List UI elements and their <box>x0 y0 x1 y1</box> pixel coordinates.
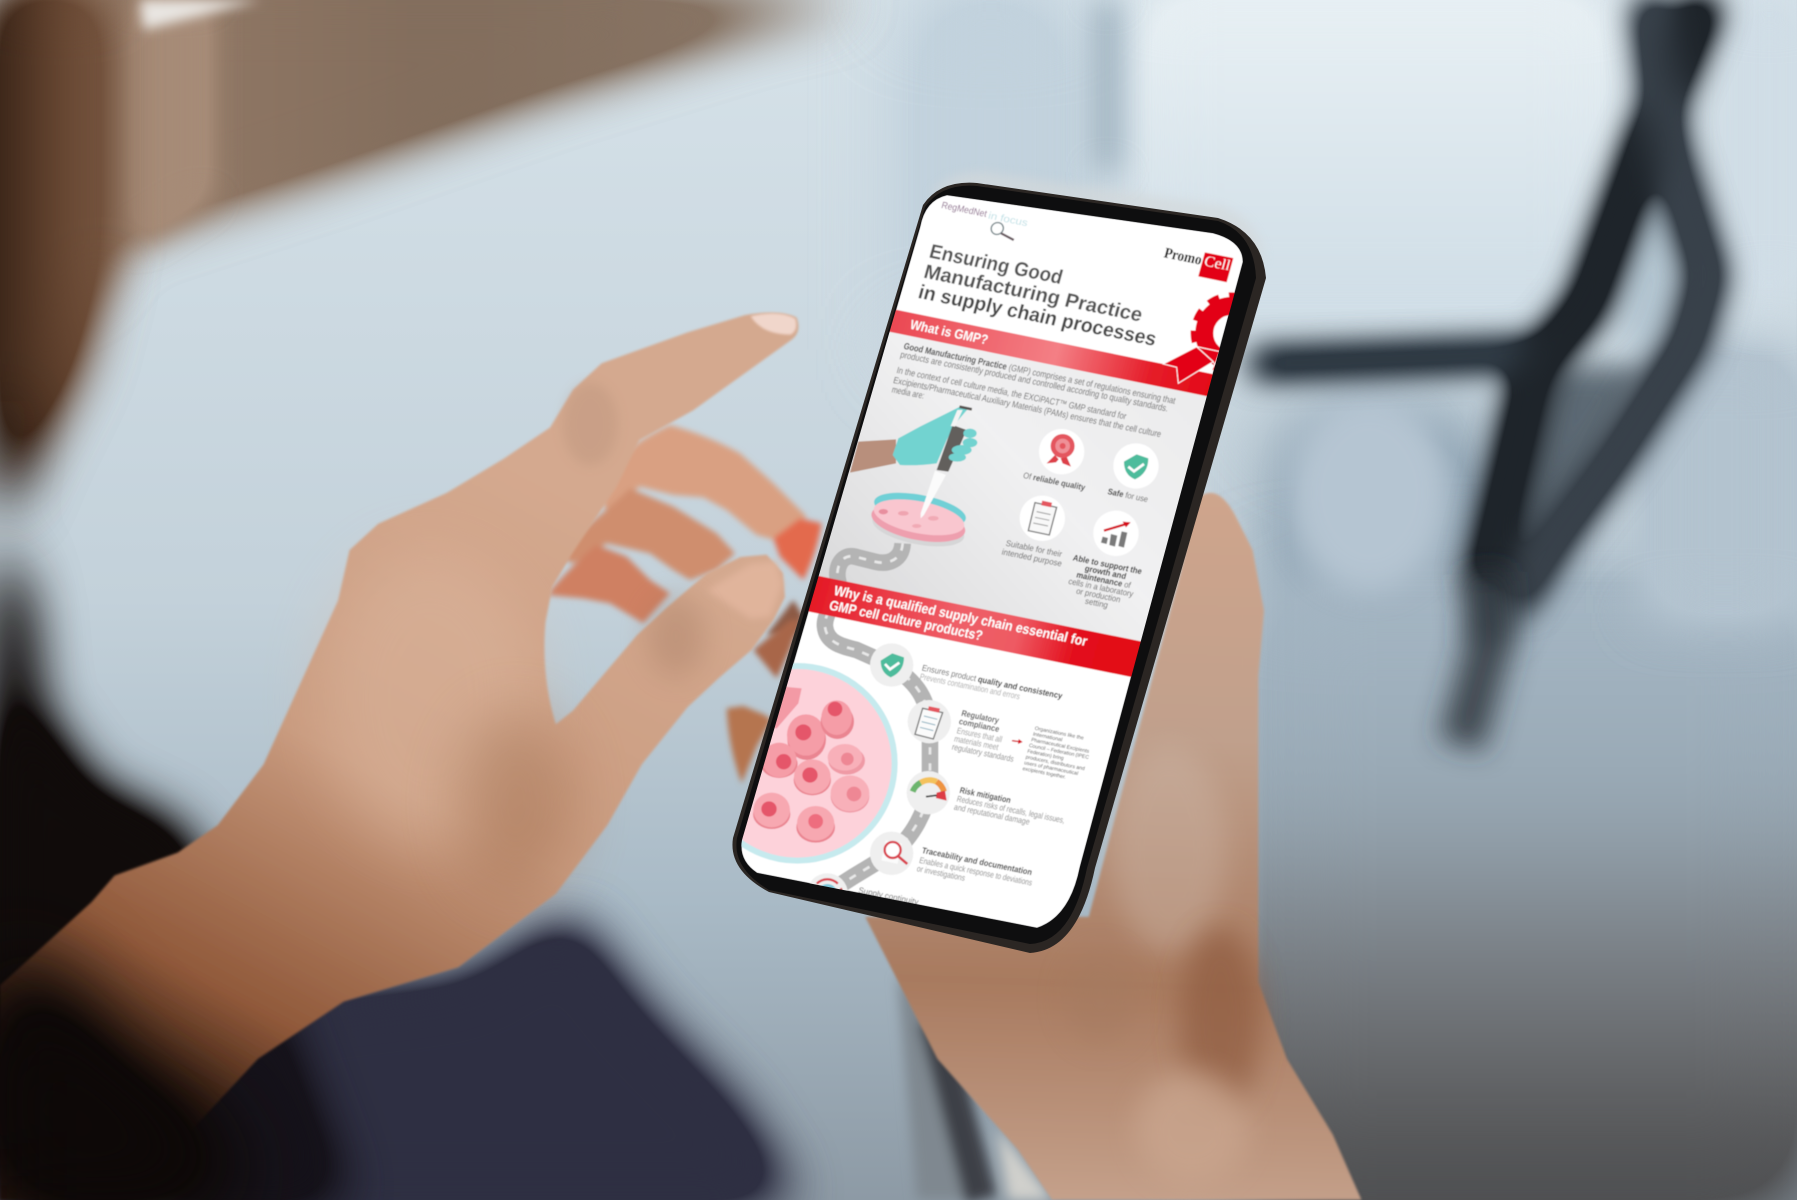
phone screen <box>741 195 1243 928</box>
organisation note: Federation) bring <box>1026 749 1064 762</box>
grey strip and pale floor below right hand <box>897 974 1052 1200</box>
quality labels <box>1001 472 1148 610</box>
GMP description text <box>891 342 1176 438</box>
logo: RegMedNet in focus: in focus <box>987 211 1029 229</box>
phone body <box>732 172 1266 953</box>
quality labels: growth and <box>1084 563 1128 581</box>
icon: shield step <box>870 643 913 687</box>
banner: why qualified supply chain: Why is a qualified supply chain essential for <box>832 582 1090 649</box>
step: regulatory compliance text: Ensures that all <box>956 725 1003 744</box>
organisation note: International <box>1032 732 1063 743</box>
quality labels: cells in a laboratory <box>1067 576 1135 599</box>
banner: why qualified supply chain: GMP cell culture products? <box>828 597 985 643</box>
quality labels: Able to support the <box>1072 553 1143 576</box>
title: Ensuring Good <box>927 241 1065 289</box>
icon: magnifier on document <box>870 832 913 875</box>
illustration: gloved hand, pipette and petri dish <box>850 405 977 553</box>
screen white background <box>741 195 1243 928</box>
step: traceability text: or investigations <box>916 863 966 883</box>
logo: PromoCell <box>1160 245 1233 282</box>
organisation note: producers, distributors and <box>1025 755 1085 772</box>
petri dish <box>871 492 966 546</box>
GMP description text: products are consistently produced and controlled according to quality standards. <box>899 350 1169 414</box>
quality labels: Of reliable quality <box>1022 470 1087 492</box>
step: risk mitigation text <box>953 785 1069 833</box>
cells <box>753 687 869 843</box>
icon: shield <box>1113 443 1159 489</box>
title <box>918 244 1156 346</box>
grey section panel <box>818 332 1207 642</box>
logo: RegMedNet in focus: RegMedNet <box>940 200 988 220</box>
step: risk mitigation text: Reduces risks of recalls, legal issues, <box>956 794 1066 825</box>
step: product quality text: Ensures product quality and consistency <box>921 663 1064 701</box>
person: dark garment <box>172 923 791 1200</box>
logo: PromoCell: Cell <box>1202 254 1232 274</box>
quality labels: maintenance of <box>1075 570 1133 590</box>
title: in supply chain processes <box>916 281 1159 351</box>
left hand fingers reaching behind the phone <box>547 425 822 635</box>
organisation note: users of pharmaceutical <box>1023 760 1079 777</box>
step: product quality text: Prevents contamination and errors <box>919 671 1021 701</box>
GMP description text: Excipients/Pharmaceutical Auxiliary Materials (PAMs) ensures that the cell culture <box>892 375 1162 439</box>
glove fingers <box>949 429 977 462</box>
quality labels: Safe for use <box>1107 486 1150 504</box>
organisation note: Organizations like the <box>1034 726 1085 742</box>
step: regulatory compliance text: Regulatory <box>960 708 1000 725</box>
four quality icons <box>1020 429 1159 556</box>
step: risk mitigation text: and reputational damage <box>953 802 1031 827</box>
pipette <box>921 405 972 518</box>
step: supply continuity text: Supply continuity <box>857 885 920 907</box>
quality labels: intended purpose <box>1001 547 1063 569</box>
step: risk mitigation text: Risk mitigation <box>959 785 1012 805</box>
GMP description text: Good Manufacturing Practice (GMP) comprises a set of regulations ensuring that <box>903 341 1177 406</box>
person: hair <box>0 401 201 1200</box>
step: traceability text <box>916 845 1036 896</box>
organisation note <box>1022 726 1094 784</box>
heading: What is GMP?: What is GMP? <box>908 317 990 347</box>
organisation note: Pharmaceutical Excipients <box>1030 737 1090 755</box>
supply chain step icons <box>807 643 951 915</box>
brown left column <box>0 0 101 521</box>
arm <box>850 439 896 473</box>
logo: RegMedNet in focus <box>936 200 1029 242</box>
gear and ribbon badge <box>1162 292 1235 385</box>
arrow to organisation note <box>1012 739 1023 744</box>
organisation note: excipients together. <box>1022 766 1066 781</box>
wall <box>0 0 860 321</box>
step: traceability text: Traceability and documentation <box>921 845 1033 877</box>
right hand <box>865 493 1361 1200</box>
icon: clipboard <box>1020 496 1065 541</box>
left hand <box>0 313 798 1200</box>
step: traceability text: Enables a quick response to deviations <box>918 855 1034 888</box>
wall light band <box>132 0 206 243</box>
icon: clipboard step <box>908 700 951 743</box>
step: regulatory compliance text: regulatory standards <box>951 742 1015 764</box>
icon: globe with arrows <box>807 873 848 915</box>
icon: risk gauge <box>907 771 950 814</box>
banner: why qualified supply chain <box>808 575 1141 678</box>
GMP description text: In the context of cell culture media, the EXCiPACT™ GMP standard for <box>896 365 1128 421</box>
quality labels: Suitable for their <box>1005 538 1063 559</box>
logo: PromoCell: Promo <box>1162 246 1204 269</box>
icon: growth chart <box>1093 511 1139 556</box>
quality labels: or production <box>1075 586 1122 604</box>
organisation note: Council – Federation (IPEC <box>1028 743 1090 761</box>
step: regulatory compliance text: compliance <box>958 716 1001 734</box>
banner: what is GMP <box>890 309 1213 397</box>
step: regulatory compliance text <box>951 708 1024 764</box>
glove <box>893 407 968 465</box>
quality labels: setting <box>1084 596 1109 610</box>
GMP description text: media are: <box>891 384 926 401</box>
road path <box>825 543 930 893</box>
step: regulatory compliance text: materials meet <box>953 734 1000 752</box>
icon: rosette <box>1039 429 1084 474</box>
title: Manufacturing Practice <box>921 261 1145 326</box>
fingers behind phone edge <box>727 620 800 783</box>
illustration: magnified cells in circle <box>741 662 898 864</box>
